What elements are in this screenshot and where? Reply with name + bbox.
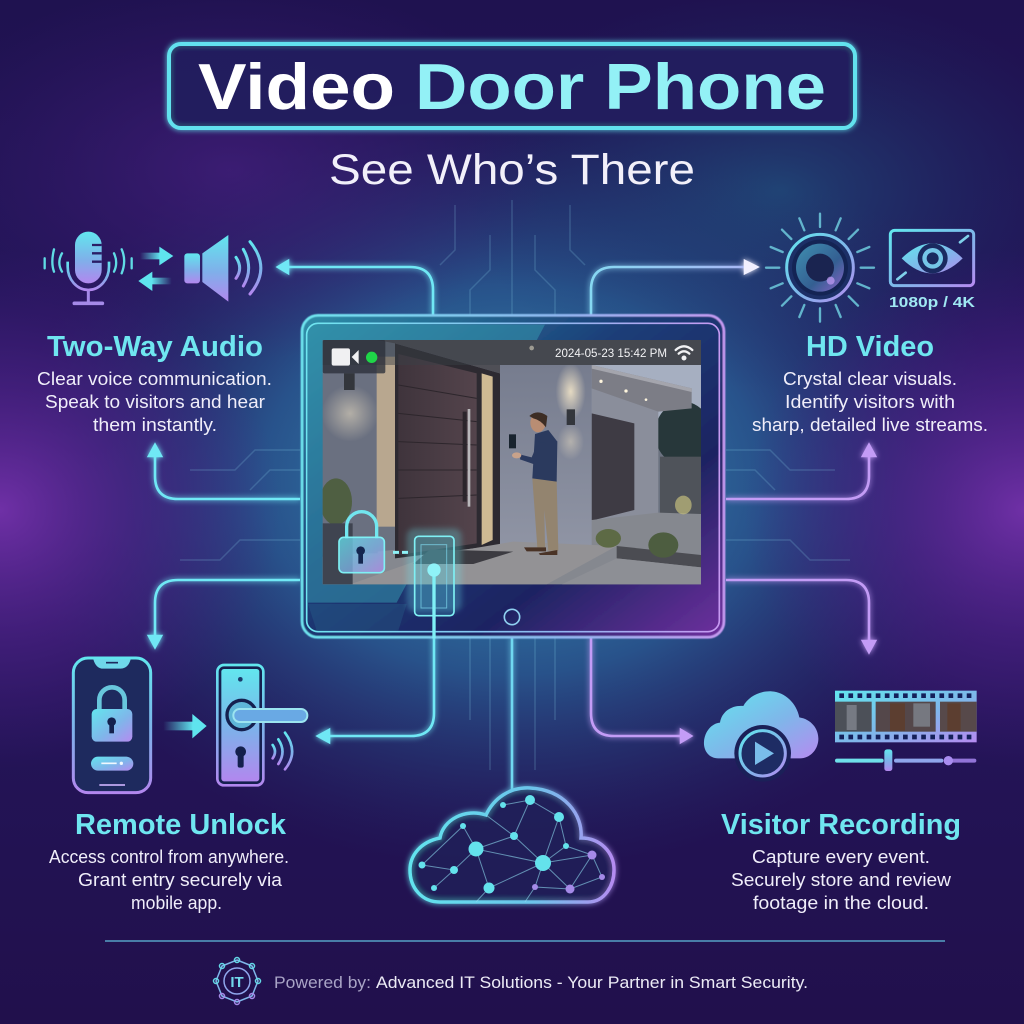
icon: phone, arrow and door handle	[73, 658, 307, 793]
description: remote unlock	[49, 847, 289, 913]
door panel overlay	[407, 528, 462, 638]
footer text: Advanced IT Solutions - Your Partner in Smart Security.	[376, 974, 808, 992]
description: visitor recording: Securely store and review	[731, 870, 952, 890]
description: two-way audio: Clear voice communication.	[37, 369, 272, 389]
icon: network cloud	[410, 788, 614, 902]
description: HD video	[752, 369, 988, 435]
tablet monitor	[302, 315, 724, 638]
arrow: tablet to cloud playback	[591, 637, 691, 742]
title text: Video	[198, 50, 395, 123]
description: two-way audio: Speak to visitors and hear	[45, 392, 265, 412]
description: visitor recording	[731, 847, 952, 913]
description: HD video: Crystal clear visuals.	[783, 369, 957, 389]
description: two-way audio	[37, 369, 272, 435]
icon: IT logo: IT	[230, 974, 244, 991]
arrow: tablet to HD video text	[726, 445, 875, 499]
panel: visitor recording	[704, 691, 977, 913]
visitor figure	[509, 412, 558, 555]
connector arrows	[149, 261, 875, 790]
lock overlay	[339, 512, 408, 573]
arrow: tablet to visitor recording icons	[726, 580, 875, 652]
camera feed photo	[320, 340, 712, 584]
home button	[504, 609, 520, 625]
icon: microphone	[45, 232, 132, 303]
faint circuit traces	[180, 200, 850, 770]
icon: door handle	[217, 665, 307, 785]
icon: film strip	[835, 691, 977, 742]
icon: phone	[73, 658, 151, 793]
title text	[198, 50, 826, 123]
label: resolution: 1080p / 4K	[889, 294, 975, 311]
title banner	[169, 44, 855, 128]
arrow: tablet to cloud	[511, 637, 513, 790]
arrow: tablet to HD video	[591, 261, 757, 315]
footer divider	[105, 940, 945, 942]
arrow: door panel to door handle	[318, 570, 434, 742]
description: remote unlock: Access control from anywhere.	[49, 847, 289, 867]
icon: microphone and speaker	[45, 232, 261, 303]
heading: two-way audio: Two-Way Audio	[47, 331, 263, 363]
icon: cloud with play button	[704, 691, 818, 782]
description: remote unlock: Grant entry securely via	[78, 870, 283, 890]
icon: speaker	[184, 235, 261, 302]
icon: camera lens with rays	[766, 214, 874, 322]
footer text: Powered by:	[274, 974, 371, 992]
icon: playback slider	[835, 749, 976, 771]
description: visitor recording: footage in the cloud.	[753, 893, 929, 913]
timestamp: 2024-05-23 15:42 PM	[555, 346, 667, 360]
camera status icon	[332, 348, 377, 366]
description: HD video: sharp, detailed live streams.	[752, 415, 988, 435]
icon: two-way arrows	[138, 247, 173, 291]
heading: visitor recording: Visitor Recording	[721, 809, 961, 841]
subtitle: See Who’s There	[329, 146, 695, 194]
panel: HD video	[752, 214, 988, 435]
footer	[214, 958, 808, 1004]
icon: IT logo	[214, 958, 260, 1004]
panel: two-way audio	[37, 232, 272, 435]
arrow: tablet to two-way audio text	[149, 445, 300, 499]
wifi icon	[676, 346, 692, 359]
description: visitor recording: Capture every event.	[752, 847, 930, 867]
description: remote unlock: mobile app.	[131, 893, 222, 913]
heading: remote unlock: Remote Unlock	[75, 809, 287, 841]
description: two-way audio: them instantly.	[93, 415, 217, 435]
arrow: tablet to two-way audio icons	[278, 261, 433, 315]
icon: eye screen	[890, 230, 974, 286]
title text: Door Phone	[415, 50, 826, 123]
arrow: tablet to remote unlock icons	[149, 580, 300, 647]
description: HD video: Identify visitors with	[785, 392, 955, 412]
heading: HD video: HD Video	[806, 331, 934, 363]
icon: arrow	[163, 714, 207, 738]
panel: remote unlock	[49, 658, 307, 913]
